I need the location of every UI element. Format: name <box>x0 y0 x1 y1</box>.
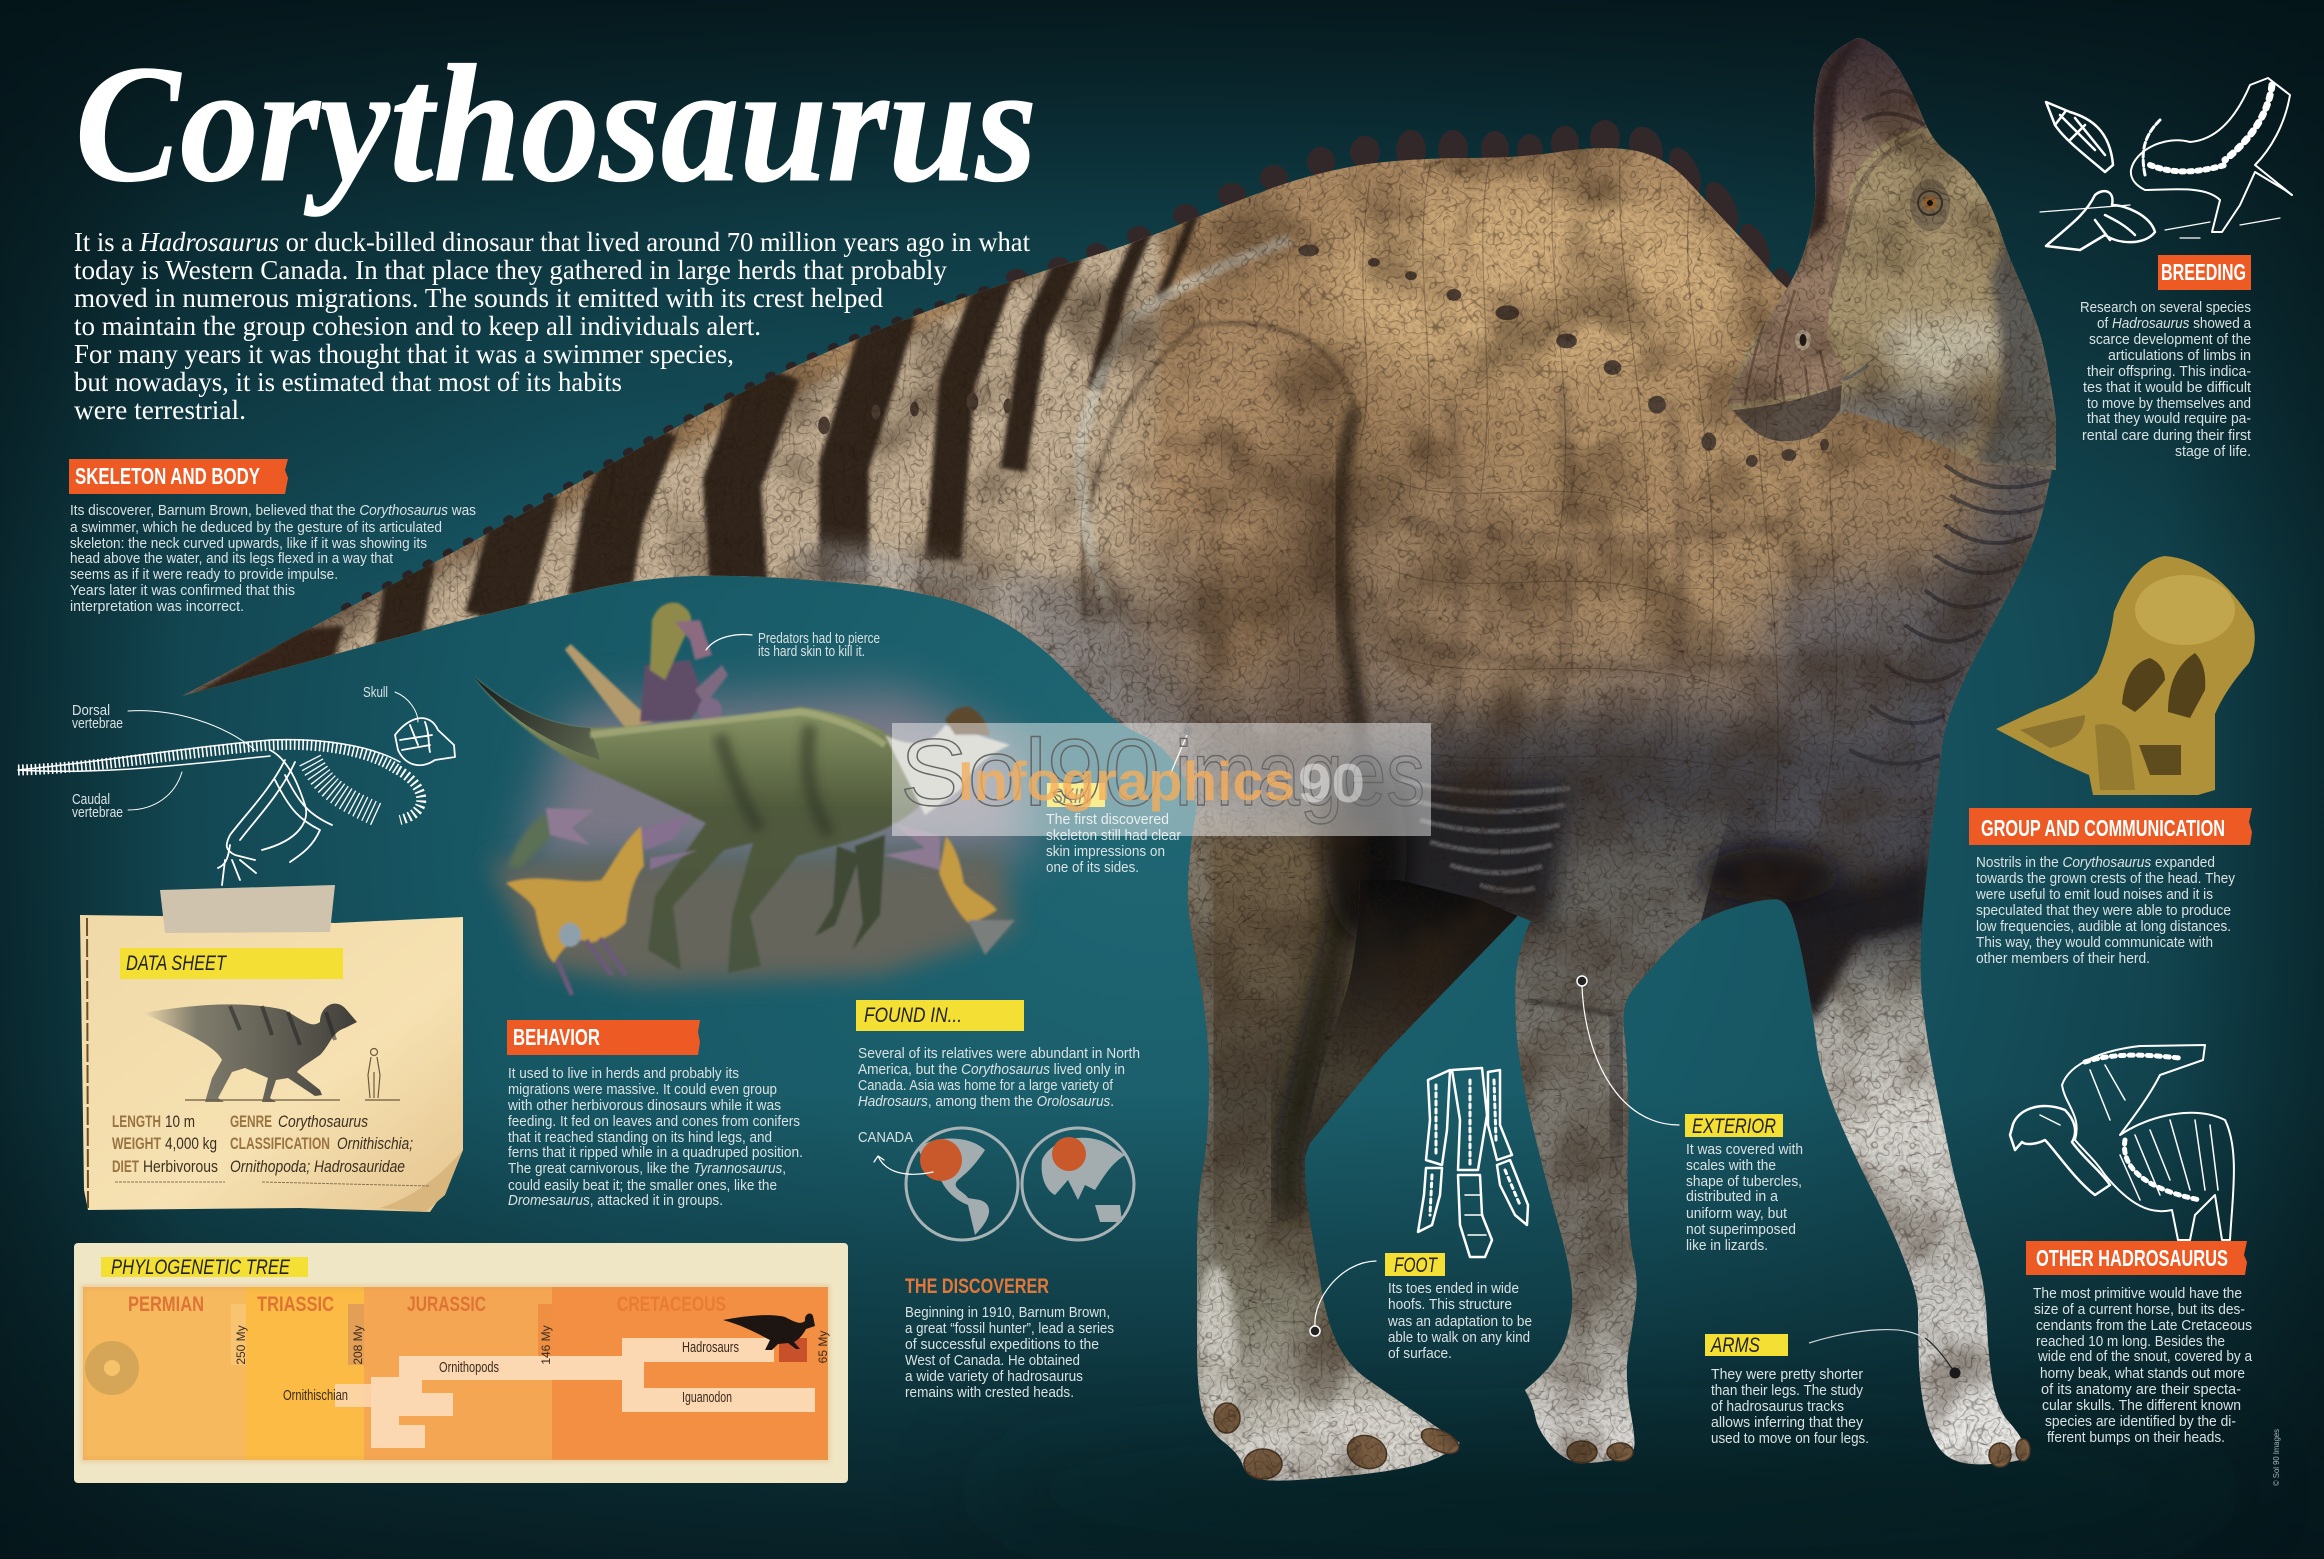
skeleton labels: Dorsal <box>72 702 110 719</box>
intro text: to maintain the group cohesion and to keep all individuals alert. <box>74 311 761 341</box>
section: behavior: The great carnivorous, like the Tyrannosaurus, <box>508 1160 786 1177</box>
section: skeleton and body: a swimmer, which he deduced by the gesture of its articulated <box>70 519 442 536</box>
section: the discoverer: a wide variety of hadrosaurus <box>905 1368 1083 1385</box>
breeding text: of Hadrosaurus showed a <box>2097 315 2252 332</box>
skeleton labels <box>72 684 388 821</box>
section: group and communication: other members of their herd. <box>1976 950 2150 967</box>
dorsal spikes <box>1006 120 1797 299</box>
lower chest and neck shading <box>1757 552 1960 738</box>
section: skeleton and body: head above the water, and its legs flexed in a way that <box>70 550 394 567</box>
watermark: 90 <box>1298 752 1365 814</box>
main dinosaur illustration <box>150 20 2070 1500</box>
section: the discoverer: Beginning in 1910, Barnum Brown, <box>905 1304 1110 1321</box>
data rows: GENRE <box>230 1113 272 1131</box>
section: other hadrosaurus: cendants from the Late Cretaceous <box>2036 1317 2252 1334</box>
intro text: were terrestrial. <box>74 395 246 425</box>
time ticks <box>234 1325 830 1365</box>
watermark: Sol90 <box>900 720 1160 826</box>
breeding text: to move by themselves and <box>2087 395 2251 412</box>
section: other hadrosaurus <box>2026 1241 2253 1446</box>
section: skeleton and body: Years later it was confirmed that this <box>70 582 295 599</box>
section: skeleton and body: seems as if it were ready to provide impulse. <box>70 566 338 583</box>
exterior leader <box>1577 976 1679 1125</box>
section: group and communication: towards the grown crests of the head. They <box>1976 870 2235 887</box>
section: behavior: ferns that it ripped while in a quadruped position. <box>508 1144 803 1161</box>
section: group and communication: low frequencies, audible at long distances. <box>1976 918 2231 935</box>
skeleton labels: vertebrae <box>72 715 123 732</box>
green hadrosaur <box>474 677 925 973</box>
time ticks: 250 My <box>234 1325 248 1365</box>
section: behavior: It used to live in herds and probably its <box>508 1065 739 1082</box>
neck bands <box>1850 465 2050 764</box>
section: other hadrosaurus: fferent bumps on their heads. <box>2047 1429 2225 1446</box>
foot leader <box>1310 1261 1376 1336</box>
heading: other hadrosaurus: OTHER HADROSAURUS <box>2036 1245 2228 1271</box>
watermark: Infographics <box>958 750 1295 812</box>
data rows: 10 m <box>165 1113 195 1131</box>
section: exterior: uniform way, but <box>1686 1205 1788 1222</box>
data rows: 4,000 kg <box>165 1135 217 1153</box>
data sheet heading: DATA SHEET <box>126 952 228 975</box>
section: skeleton and body: skeleton: the neck curved upwards, like if it was showing its <box>70 535 427 552</box>
section: breeding <box>2040 78 2292 460</box>
section: group and communication: This way, they would communicate with <box>1976 934 2213 951</box>
data rows: CLASSIFICATION <box>230 1135 330 1153</box>
section: foot: hoofs. This structure <box>1388 1296 1512 1313</box>
breeding text: that they would require pa- <box>2087 410 2251 427</box>
section: exterior: It was covered with <box>1686 1141 1803 1158</box>
section: found in: America, but the Corythosaurus lived only in <box>858 1061 1125 1078</box>
section: arms: used to move on four legs. <box>1711 1430 1869 1447</box>
other hadrosaurs line art <box>2010 1045 2234 1240</box>
section: the discoverer: remains with crested heads. <box>905 1384 1074 1401</box>
section: exterior: shape of tubercles, <box>1686 1173 1802 1190</box>
thigh crease and outline <box>1336 402 1372 755</box>
skeleton labels: vertebrae <box>72 804 123 821</box>
section: other hadrosaurus: reached 10 m long. Besides the <box>2036 1333 2225 1350</box>
data rows <box>112 1113 413 1176</box>
panel: data sheet <box>80 885 463 1212</box>
section: found in: CANADA <box>858 1129 913 1146</box>
tree branches <box>335 1338 815 1448</box>
section: skeleton and body: Its discoverer, Barnum Brown, believed that the Corythosaurus was <box>70 502 476 519</box>
time ticks: 146 My <box>539 1325 553 1365</box>
middle leg colour <box>1505 790 1735 1490</box>
eye <box>1910 179 1950 231</box>
section: other hadrosaurus: cular skulls. The different known <box>2042 1397 2241 1414</box>
tape <box>160 885 335 933</box>
section: group and communication <box>1969 808 2252 967</box>
section: group and communication: Nostrils in the Corythosaurus expanded <box>1976 854 2215 871</box>
section: behavior <box>507 1020 803 1209</box>
breeding line art <box>2040 78 2292 250</box>
sketch of dinosaur <box>143 1004 357 1102</box>
time ticks: 208 My <box>351 1325 365 1365</box>
section: group and communication: speculated that they were able to produce <box>1976 902 2231 919</box>
right raptor <box>884 823 1015 955</box>
section: skin: The first discovered <box>1046 811 1169 828</box>
data rows: LENGTH <box>112 1113 161 1131</box>
era labels <box>128 1293 726 1316</box>
breeding text <box>2080 299 2252 460</box>
section: exterior: scales with the <box>1686 1157 1776 1174</box>
heading: behavior <box>507 1020 700 1055</box>
intro text: but nowadays, it is estimated that most of its habits <box>74 367 622 397</box>
section: behavior: that it reached standing on its hind legs, and <box>508 1129 772 1146</box>
tree labels: Ornithischian <box>283 1387 348 1404</box>
era labels: PERMIAN <box>128 1293 204 1316</box>
section: skin: one of its sides. <box>1046 859 1139 876</box>
breeding text: scarce development of the <box>2089 331 2251 348</box>
human scale figure <box>185 1048 400 1100</box>
heading: skin: SKIN <box>1052 785 1091 808</box>
tail stripes <box>188 215 1203 694</box>
section: skin <box>1046 726 1192 876</box>
era bands <box>83 1287 828 1460</box>
section: exterior: like in lizards. <box>1686 1237 1768 1254</box>
nostril <box>1795 330 1811 350</box>
tree labels: Ornithopods <box>439 1359 499 1376</box>
skin textures <box>150 20 2070 1500</box>
section: found in <box>856 1000 1140 1240</box>
data rows: Ornithopoda; Hadrosauridae <box>230 1158 405 1176</box>
far hind leg <box>1298 850 1545 1175</box>
skeleton labels: Caudal <box>72 791 110 808</box>
section: found in: Hadrosaurs, among them the Orolosaurus. <box>858 1093 1114 1110</box>
era labels: JURASSIC <box>407 1293 486 1316</box>
intro text: moved in numerous migrations. The sounds it emitted with its crest helped <box>74 283 883 313</box>
predator note <box>706 630 880 660</box>
tree labels: Hadrosaurs <box>682 1339 739 1356</box>
crest skull fossil <box>1996 556 2255 795</box>
heading: phylogenetic tree: PHYLOGENETIC TREE <box>111 1256 291 1279</box>
left raptor <box>506 808 698 995</box>
copyright note: © Sol 90 Images <box>2272 1429 2281 1486</box>
heading: group and communication: GROUP AND COMMUNICATION <box>1981 815 2225 841</box>
globes <box>906 1128 1134 1240</box>
section: behavior: with other herbivorous dinosaurs while it was <box>507 1097 781 1114</box>
section: exterior: distributed in a <box>1686 1188 1779 1205</box>
heading: foot: FOOT <box>1394 1254 1439 1277</box>
heading: group and communication <box>1969 808 2252 845</box>
skeleton leader lines <box>128 692 418 810</box>
tree labels <box>283 1339 739 1406</box>
section: behavior: could easily beat it; the smaller ones, like the <box>508 1177 777 1194</box>
head <box>1725 34 2060 470</box>
section: foot: of surface. <box>1388 1345 1452 1362</box>
section: the discoverer <box>905 1275 1114 1401</box>
era labels: TRIASSIC <box>257 1293 334 1316</box>
intro text <box>74 227 1030 425</box>
intro text: For many years it was thought that it was a swimmer species, <box>74 339 734 369</box>
section: found in: Canada. Asia was home for a large variety of <box>858 1077 1114 1094</box>
breeding text: Research on several species <box>2080 299 2251 316</box>
heading: other hadrosaurus <box>2026 1241 2247 1275</box>
predator on top <box>568 603 728 725</box>
floor shadow <box>960 1430 2240 1550</box>
section: behavior: migrations were massive. It could even group <box>508 1081 777 1098</box>
section: other hadrosaurus: horny beak, what stands out more <box>2040 1365 2245 1382</box>
section: arms: They were pretty shorter <box>1711 1366 1863 1383</box>
section: other hadrosaurus: species are identified by the di- <box>2045 1413 2236 1430</box>
section: skin: skeleton still had clear <box>1046 827 1181 844</box>
skeleton labels: Skull <box>363 684 388 701</box>
section: foot <box>1310 1253 1532 1362</box>
section: skeleton and body: interpretation was incorrect. <box>70 598 244 615</box>
right leg colour <box>1767 812 2022 1464</box>
section: arms: of hadrosaurus tracks <box>1711 1398 1844 1415</box>
torso wrinkles <box>1360 160 1837 830</box>
section: skeleton and body <box>69 459 476 615</box>
watermark: images <box>1175 723 1425 825</box>
intro text: today is Western Canada. In that place they gathered in large herds that probably <box>74 255 947 285</box>
intro text: It is a Hadrosaurus or duck-billed dinosaur that lived around 70 million years ago in what <box>74 227 1030 257</box>
section: found in: Several of its relatives were abundant in North <box>858 1045 1140 1062</box>
section: foot: able to walk on any kind <box>1388 1329 1530 1346</box>
lower beak <box>1733 385 1842 445</box>
body folds <box>1399 377 1804 724</box>
heading: skeleton and body: SKELETON AND BODY <box>75 463 260 489</box>
foot bones line art <box>1418 1068 1528 1257</box>
heading: breeding <box>2158 255 2251 290</box>
data rows: WEIGHT <box>112 1135 161 1153</box>
section: other hadrosaurus: of its anatomy are their specta- <box>2041 1381 2241 1398</box>
osteoderms <box>818 245 1829 467</box>
heading: found in <box>856 1000 1024 1031</box>
section: foot: Its toes ended in wide <box>1388 1280 1519 1297</box>
behavior illustration <box>474 603 1030 995</box>
panel: phylogenetic tree <box>74 1243 848 1483</box>
data rows: Ornithischia; <box>337 1135 413 1153</box>
era labels: CRETACEOUS <box>617 1293 726 1316</box>
torso tail and legs <box>150 148 2056 1490</box>
breeding text: their offspring. This indica- <box>2087 363 2251 380</box>
data sheet heading <box>120 948 343 979</box>
arms leader <box>1809 1330 1960 1378</box>
tree labels: Iguanodon <box>682 1389 732 1406</box>
section: the discoverer: of successful expeditions to the <box>905 1336 1099 1353</box>
section: arms <box>1705 1330 1960 1447</box>
section: exterior: not superimposed <box>1686 1221 1796 1238</box>
heading: arms: ARMS <box>1709 1334 1760 1357</box>
section: other hadrosaurus: size of a current horse, but its des- <box>2034 1301 2245 1318</box>
section: exterior <box>1577 976 1803 1254</box>
section: behavior: Dromesaurus, attacked it in groups. <box>508 1192 723 1209</box>
heading: breeding: BREEDING <box>2161 259 2246 285</box>
heading: found in: FOUND IN... <box>864 1004 962 1027</box>
section: behavior: feeding. It fed on leaves and cones from conifers <box>508 1113 800 1130</box>
section: group and communication: were useful to emit loud noises and it is <box>1975 886 2213 903</box>
breeding text: stage of life. <box>2175 443 2251 460</box>
predator note: its hard skin to kill it. <box>758 643 865 660</box>
data rows: DIET <box>112 1158 139 1176</box>
pale shoulder streak <box>1080 240 1290 610</box>
heading: exterior: EXTERIOR <box>1692 1115 1776 1138</box>
hind leg colour <box>1188 805 1460 1481</box>
canada arrow <box>874 1156 933 1174</box>
watermark <box>892 720 1431 836</box>
section: arms: than their legs. The study <box>1711 1382 1863 1399</box>
breeding text: tes that it would be difficult <box>2083 379 2252 396</box>
breeding text: articulations of limbs in <box>2108 347 2251 364</box>
time ticks: 65 My <box>816 1331 830 1363</box>
section: skin: skin impressions on <box>1046 843 1165 860</box>
section: the discoverer: THE DISCOVERER <box>905 1275 1049 1298</box>
title: Corythosaurus <box>75 31 1037 217</box>
belly between legs <box>1360 780 1570 930</box>
data rows: Corythosaurus <box>278 1113 368 1131</box>
section: foot: was an adaptation to be <box>1387 1313 1532 1330</box>
skeleton drawing <box>18 684 455 885</box>
skin pointer <box>1170 726 1192 775</box>
crest and snout band <box>1725 38 1925 405</box>
toe nails <box>1214 1403 2030 1479</box>
silhouette <box>723 1314 815 1350</box>
data rows: Herbivorous <box>143 1158 218 1176</box>
neck and head of green hadrosaur <box>885 707 1010 815</box>
section: the discoverer: West of Canada. He obtained <box>905 1352 1080 1369</box>
breeding text: rental care during their first <box>2082 427 2252 444</box>
far legs <box>815 835 885 950</box>
section: arms: allows inferring that they <box>1711 1414 1863 1431</box>
predator note: Predators had to pierce <box>758 630 880 647</box>
heading: behavior: BEHAVIOR <box>513 1024 600 1050</box>
tail bumps <box>345 285 1000 608</box>
section: other hadrosaurus: wide end of the snout, covered by a <box>2037 1348 2253 1365</box>
heading: skeleton and body <box>69 459 288 494</box>
section: other hadrosaurus: The most primitive would have the <box>2033 1285 2242 1302</box>
section: the discoverer: a great “fossil hunter”, lead a series <box>905 1320 1114 1337</box>
